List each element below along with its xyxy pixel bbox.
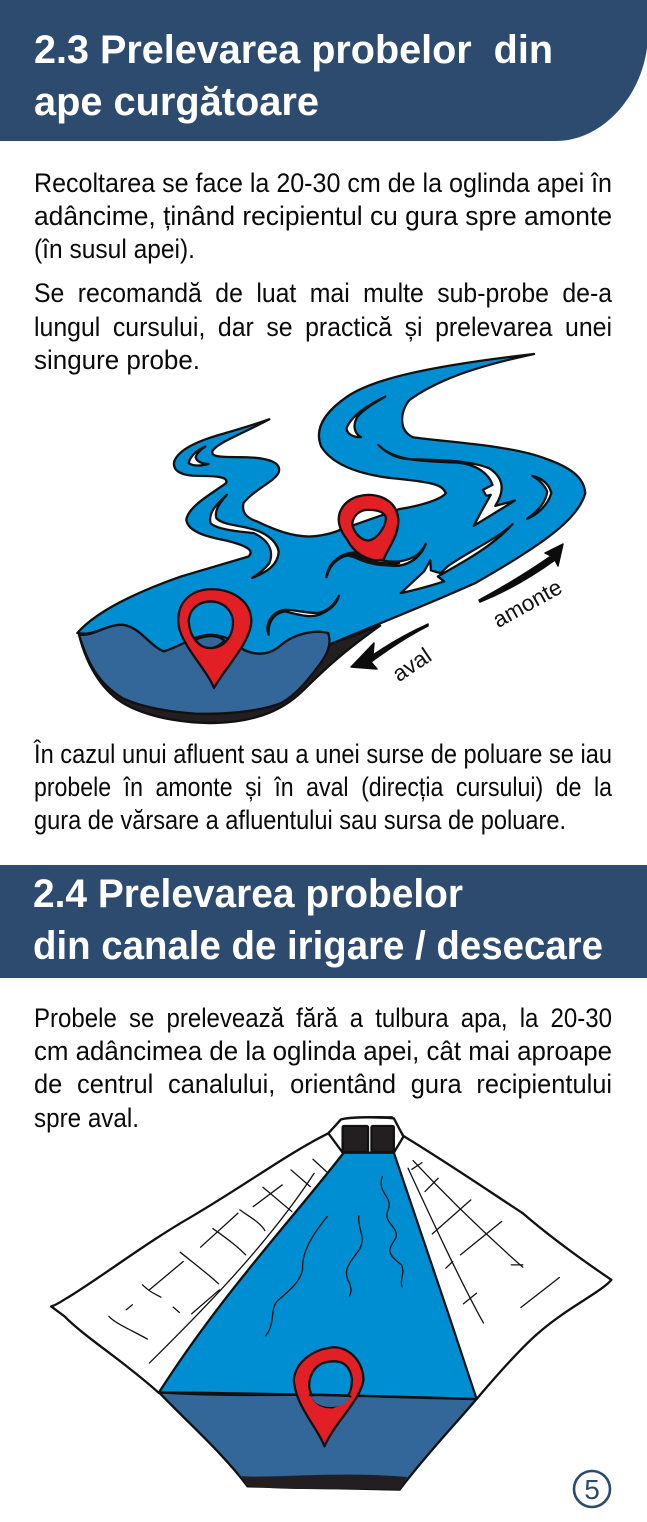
river cross-section [79,625,329,714]
text block: sub-samples: singure probe. [34,345,200,375]
sluice gate [328,1117,403,1153]
label: amonte: amonte [488,574,566,633]
illustration: irrigation canal [51,1117,611,1490]
canal water [159,1153,477,1399]
white current marks [189,397,551,635]
arrow: amonte [479,544,563,602]
heading: section 2.4 [0,865,647,978]
heading: section 2.3: ape curgătoare [34,80,319,124]
text block: tributary: gura de vărsare a afluentului sau sursa de poluare. [34,805,566,835]
pin: canal sample point [294,1347,363,1446]
text block: canal sampling [34,1003,612,1133]
arrow: aval [351,624,428,669]
field furrows right [408,1161,559,1323]
text block: sampling depth [34,168,612,264]
text block: canal sampling: spre aval. [34,1103,139,1133]
text block: canal sampling: de centrul canalului, orientând gura recipientului [34,1069,612,1099]
text block: sampling depth: (în susul apei). [34,234,195,264]
text block: sampling depth: adâncime, ținând recipientul cu gura spre amonte [34,201,612,231]
pin: upstream sample point [326,495,426,577]
heading: section 2.4: din canale de irigare / desecare [33,924,603,968]
heading: section 2.3: 2.3 Prelevarea probelor din [34,28,553,72]
river water [77,354,585,654]
pin: downstream sample point [178,589,251,688]
field furrows left [109,1159,326,1363]
canal banks [51,1117,611,1399]
heading: section 2.3 [0,0,647,141]
text block: sub-samples [34,278,612,375]
text block: sub-samples: Se recomandă de luat mai multe sub-probe de-a [34,278,612,308]
text block: canal sampling: cm adâncimea de la oglinda apei, cât mai aproape [34,1036,612,1066]
river bed shadow [79,626,380,723]
text block: sub-samples: lungul cursului, dar se practică și prelevarea unei [34,312,612,342]
canal cross-section [159,1392,477,1490]
label: aval: aval [388,643,436,687]
canal bed [242,1475,407,1490]
page number: 5 [584,1474,600,1505]
water ripples [266,1177,403,1336]
text block: tributary [33,739,612,835]
page number [574,1471,610,1507]
heading: section 2.4: 2.4 Prelevarea probelor [33,872,463,916]
text block: sampling depth: Recoltarea se face la 20-30 cm de la oglinda apei în [34,168,612,198]
illustration: river with sampling pins [77,354,585,723]
